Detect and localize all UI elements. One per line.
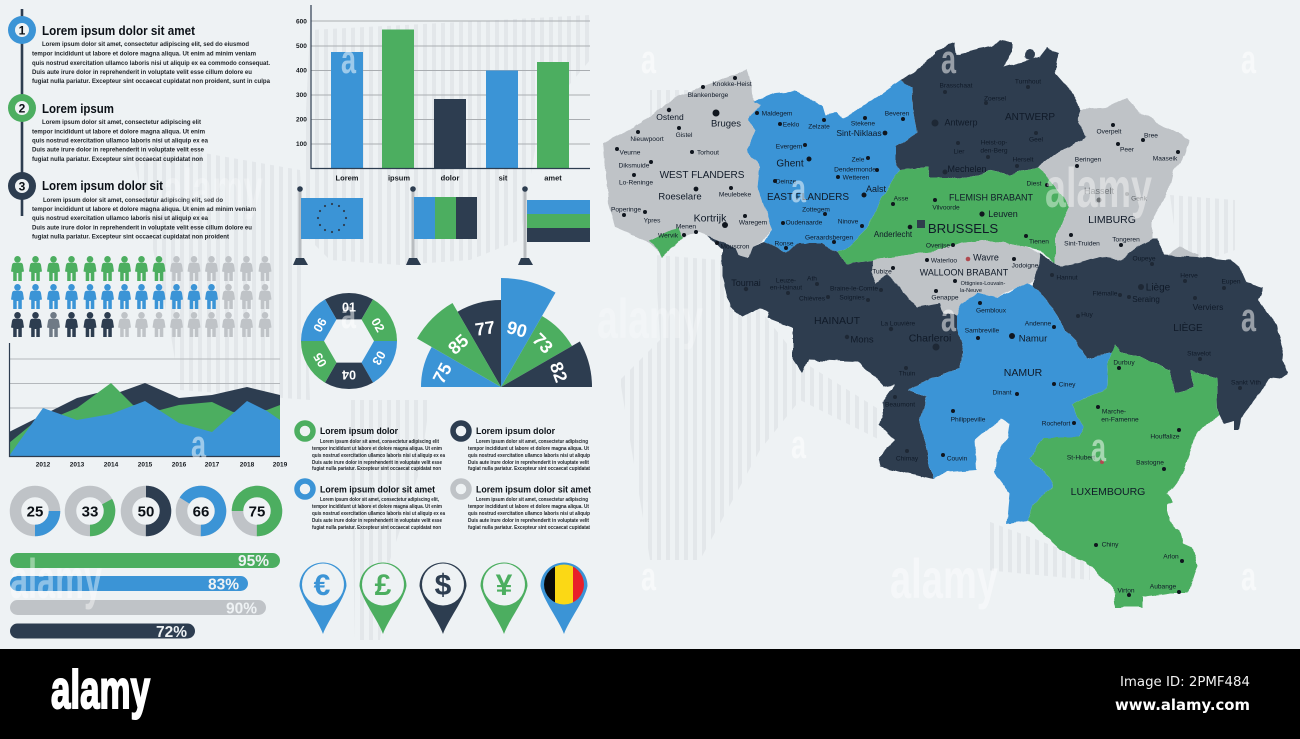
city labels: Hasselt [1084, 186, 1115, 196]
city labels: Philippeville [951, 416, 986, 424]
city labels: Geraardsbergen [805, 234, 853, 242]
city labels: Beveren [885, 110, 910, 118]
area chart: 2019 [273, 462, 288, 468]
legend: dark item: quis nostrud exercitation ullamco laboris nisi ut aliquip [468, 453, 591, 459]
province labels: LIÈGE [1173, 321, 1203, 334]
city labels: Waregem [739, 220, 768, 226]
legend: blue item: Lorem ipsum dolor sit amet, consectetur adipiscing elit, [320, 497, 439, 503]
watermarks: a [1091, 426, 1107, 470]
watermarks: a [641, 555, 657, 599]
watermarks: a [341, 38, 357, 82]
city labels: Genappe [931, 294, 959, 302]
city labels: Houffalize [1150, 434, 1180, 440]
donut 25 [16, 492, 54, 530]
city labels: Ypres [644, 218, 661, 224]
city labels: Huy [1081, 312, 1094, 318]
city labels: en-Famenne [1101, 416, 1139, 424]
region: Flemish Brabant [837, 167, 1070, 263]
bar chart: ipsum [388, 174, 410, 182]
bar chart: 200 [296, 116, 307, 124]
city labels: Durbuy [1113, 360, 1135, 366]
city labels: Sint-Niklaas [836, 128, 882, 138]
watermarks: alamy [597, 287, 703, 350]
watermarks: a [941, 38, 957, 82]
watermarks: a [791, 167, 807, 211]
legend: gray item: Lorem ipsum dolor sit amet [476, 484, 592, 496]
bar chart [296, 5, 590, 182]
step 2: Lorem ipsum [42, 102, 114, 116]
city labels: Gembloux [976, 308, 1007, 314]
area chart: 2012 [36, 462, 51, 468]
bar 72% [10, 624, 195, 641]
city labels: Menen [676, 224, 696, 230]
Brussels marker [917, 220, 925, 228]
step 1: Lorem ipsum dolor sit amet, consectetur adipiscing elit, sed do eiusmod [42, 41, 249, 48]
city labels: Dendermonde [834, 166, 876, 174]
fan chart [417, 278, 592, 387]
icon: dollar pin [420, 562, 466, 634]
region: Walloon Brabant [872, 240, 1040, 315]
legend: green item: Duis aute irure dolor in reprehenderit in voluptate velit esse [312, 460, 442, 466]
step 3: tempor incididunt ut labore et dolore magna aliqua. Ut enim ad minim veniam [32, 206, 256, 213]
legend: blue item: fugiat nulla pariatur. Excepteur sint occaecat cupidatat non [312, 525, 441, 531]
step 1: Duis aute irure dolor in reprehenderit in voluptate velit esse cillum dolore eu [32, 69, 252, 76]
province labels: WEST FLANDERS [660, 170, 745, 181]
city labels: Verviers [1193, 302, 1223, 312]
people pictogram chart [11, 256, 272, 337]
legend: green item: Lorem ipsum dolor sit amet, consectetur adipiscing elit [320, 439, 439, 445]
city labels: Evergem [776, 144, 803, 150]
province labels: LIMBURG [1088, 214, 1136, 226]
city labels: Overpelt [1097, 128, 1122, 136]
fan chart: 77 [474, 317, 496, 340]
step 1: 1 [19, 24, 26, 38]
region: Antwerp [895, 40, 1087, 180]
city labels: Deinze [776, 178, 797, 186]
city labels: Anderlecht [874, 230, 913, 239]
city labels: la-Neuve [960, 288, 982, 294]
city labels: Genk [1131, 196, 1148, 202]
city labels: Stavelot [1187, 350, 1211, 358]
flag: EU style [293, 186, 363, 265]
city labels: en-Hainaut [770, 284, 802, 292]
city labels: Zelzate [808, 124, 830, 130]
fan chart: 82 [546, 359, 571, 385]
legend: gray item [453, 481, 592, 531]
legend: green item: Lorem ipsum dolor [320, 426, 398, 437]
city labels: Sankt Vith [1231, 380, 1261, 386]
step 2: fugiat nulla pariatur. Excepteur sint occaecat cupidatat non [32, 156, 203, 163]
city labels: Brasschaat [940, 82, 973, 90]
bar 83%: 83% [208, 576, 239, 594]
step 3: Lorem ipsum dolor sit amet, consectetur adipiscing elit, sed do [43, 197, 223, 204]
bar 95% [10, 553, 280, 570]
step 3: Lorem ipsum dolor sit [42, 179, 164, 193]
province labels: WALLOON BRABANT [920, 268, 1009, 278]
province labels: FLEMISH BRABANT [949, 192, 1034, 202]
hexagon ring chart: 03 [369, 348, 388, 367]
legend: gray item: tempor incididunt ut labore et dolore magna aliqua. Ut [468, 504, 589, 510]
bar chart: Lorem [336, 174, 359, 182]
step 2: 2 [19, 102, 26, 116]
watermarks: a [1241, 296, 1257, 340]
area chart: 2018 [240, 462, 255, 468]
city labels: Namur [1019, 334, 1047, 344]
city labels: Couvin [947, 456, 968, 462]
area chart: 2015 [138, 462, 153, 468]
area chart: 2017 [205, 462, 220, 468]
fan chart: 73 [528, 329, 557, 358]
legend: gray item: quis nostrud exercitation ullamco laboris nisi ut aliquip [468, 511, 591, 517]
city labels: La Louvière [881, 320, 916, 328]
icon: pound pin: £ [375, 569, 392, 602]
bar 72%: 72% [156, 624, 187, 641]
city labels: Asse [894, 196, 909, 202]
province labels: NAMUR [1004, 367, 1043, 379]
flag: vertical tricolour [406, 186, 477, 265]
city labels: Andenne [1025, 320, 1052, 328]
donut 75: 75 [249, 504, 265, 520]
legend: dark item: Duis aute irure dolor in reprehenderit in voluptate velit [468, 460, 589, 466]
donut charts [16, 484, 276, 538]
city labels: Ninove [838, 218, 859, 226]
city labels: Beaumont [885, 402, 915, 408]
watermarks: a [641, 38, 657, 82]
city labels: Oudenaarde [786, 220, 823, 226]
city labels: Jodoigne [1012, 262, 1039, 270]
footer logo: alamy [51, 660, 150, 720]
province labels: EAST FLANDERS [767, 192, 849, 203]
legend: green item [297, 423, 446, 472]
watermarks: alamy [10, 547, 102, 610]
province labels: ANTWERP [1005, 112, 1055, 123]
hexagon ring chart: 01 [342, 300, 356, 314]
step 2: tempor incididunt ut labore et dolore magna aliqua. Ut enim [32, 128, 205, 136]
city labels: Zottegem [802, 206, 830, 214]
icon: dollar pin: $ [435, 569, 452, 602]
region: Voeren enclave [1168, 247, 1198, 264]
legend: green item: tempor incididunt ut labore et dolore magna aliqua. Ut enim [312, 446, 442, 452]
legend: blue item: Duis aute irure dolor in reprehenderit in voluptate velit esse [312, 518, 442, 524]
city labels: Roeselare [658, 192, 702, 202]
flag: horizontal tricolour [518, 186, 590, 265]
city labels: Seraing [1132, 295, 1160, 304]
city labels: Veurne [620, 150, 641, 156]
city labels: Mouscron [721, 244, 750, 250]
city labels: Tournai [731, 278, 761, 288]
city labels: Sint-Truiden [1064, 240, 1100, 248]
city labels: Marche- [1102, 408, 1126, 416]
legend: gray item: Lorem ipsum dolor sit amet, consectetur adipiscing [476, 497, 588, 503]
city labels: Meulebeke [719, 192, 751, 198]
city labels: Poperinge [611, 206, 641, 214]
step 1: tempor incididunt ut labore et dolore magna aliqua. Ut enim ad minim veniam [32, 50, 256, 58]
city labels: Leuven [988, 209, 1018, 219]
icon: yen pin: ¥ [496, 569, 513, 602]
city labels: Antwerp [944, 118, 978, 128]
city labels: Ronse [774, 240, 794, 248]
watermarks: a [1241, 38, 1257, 82]
city labels: Bree [1144, 132, 1158, 140]
city labels: Chiny [1102, 542, 1119, 548]
step 1: fugiat nulla pariatur. Excepteur sint occaecat cupidatat non proident, sunt in culpa [32, 78, 270, 85]
province labels [660, 112, 1203, 498]
bar chart: 300 [296, 92, 307, 99]
city labels: Chièvres [799, 296, 826, 302]
area chart: 2014 [104, 462, 119, 468]
region: Luxembourg [1028, 345, 1218, 607]
legend: blue item: tempor incididunt ut labore et dolore magna aliqua. Ut enim [312, 504, 442, 510]
city labels: Liège [1146, 282, 1171, 294]
city dots [615, 76, 1184, 597]
city labels: Rochefort [1042, 420, 1070, 428]
city labels: Ottignies-Louvain- [961, 281, 1005, 287]
watermarks: a [791, 423, 807, 467]
city labels: Stekene [851, 120, 875, 128]
bar chart: 600 [296, 18, 307, 26]
watermarks: a [1241, 555, 1257, 599]
city labels: Diest [1026, 180, 1042, 188]
step 3: fugiat nulla pariatur. Excepteur sint occaecat cupidatat non proident [32, 234, 230, 240]
icon: yen pin [480, 562, 528, 634]
icon: euro pin: € [314, 569, 331, 602]
city labels: Chimay [896, 456, 919, 462]
city labels: Beringen [1075, 156, 1102, 164]
hexagon ring chart: 02 [368, 316, 387, 335]
city labels: Nieuwpoort [630, 136, 664, 143]
step 2: Duis aute irure dolor in reprehenderit in voluptate velit esse [32, 146, 204, 154]
city labels: Dinant [992, 390, 1012, 396]
city labels: Vilvoorde [932, 204, 960, 212]
region: West Flanders [603, 70, 772, 258]
legend: green item: fugiat nulla pariatur. Excepteur sint occaecat cupidatat non [312, 466, 441, 472]
timeline panel [8, 9, 270, 240]
watermarks: a [341, 293, 357, 337]
legend: dark item: Lorem ipsum dolor [476, 426, 555, 437]
bar chart: 400 [296, 68, 307, 74]
city labels: Aalst [866, 184, 886, 194]
watermarks: alamy [1045, 156, 1152, 219]
city labels: Overijse [926, 242, 950, 250]
donut 66 [174, 484, 228, 538]
city labels: Blankenberge [688, 92, 729, 99]
region: Namur [908, 283, 1115, 523]
bar 90%: 90% [226, 600, 257, 618]
city labels: Peer [1120, 146, 1135, 154]
city labels: Maldegem [762, 110, 793, 118]
icon: euro pin [300, 562, 346, 634]
city labels: Lier [954, 148, 965, 156]
city labels: Eupen [1221, 278, 1241, 286]
step 2 [8, 94, 208, 163]
city labels: Sambreville [965, 328, 1000, 334]
city labels: Charleroi [909, 332, 951, 344]
city labels: Oupeye [1132, 256, 1156, 262]
city labels: Hannut [1056, 274, 1078, 282]
city labels: Mechelen [947, 164, 987, 174]
bar chart: 500 [296, 43, 307, 50]
city labels: Geel [1029, 136, 1043, 144]
region: Hainaut [708, 236, 963, 480]
legend: blue item: Lorem ipsum dolor sit amet [320, 484, 436, 496]
donut 50: 50 [138, 504, 154, 520]
city labels: Tienen [1029, 238, 1049, 246]
hexagon ring chart: 06 [311, 316, 330, 335]
area chart: 2013 [70, 462, 85, 468]
footer bar [0, 649, 1300, 739]
legend: gray item: fugiat nulla pariatur. Excepteur sint occaecat cupidatat [468, 525, 590, 531]
city labels [611, 78, 1261, 594]
city labels: Wervik [658, 232, 679, 240]
city labels: Flémalle [1093, 290, 1118, 298]
donut 33 [64, 485, 116, 537]
icon: Belgian flag pin [540, 562, 588, 634]
city labels: Zele [852, 156, 865, 164]
city labels: Braine-le-Comte [830, 286, 878, 292]
progress bars [10, 553, 280, 641]
city labels: Torhout [697, 150, 719, 156]
city labels: Leuze- [776, 278, 796, 284]
city labels: Lo-Reninge [619, 180, 653, 186]
legend: green item: quis nostrud exercitation ullamco laboris nisi ut aliquip ex ea [312, 453, 446, 459]
city labels: den-Berg [980, 148, 1008, 154]
city labels: Arlon [1163, 554, 1179, 560]
map of Belgium [603, 40, 1288, 607]
region: Liege [1033, 238, 1288, 430]
city labels: Diksmuide [619, 162, 650, 170]
bar chart: amet [544, 174, 562, 182]
city labels: Zoersel [984, 96, 1007, 102]
city labels: Ciney [1059, 382, 1076, 388]
city labels: Bruges [711, 118, 741, 130]
watermarks: alamy [890, 547, 998, 610]
hexagon ring chart: 04 [342, 368, 356, 382]
hexagon ring chart [301, 293, 397, 389]
city labels: Ostend [656, 112, 684, 122]
city labels: Maaseik [1153, 156, 1178, 162]
donut 75 [238, 492, 276, 530]
city labels: Herselt [1013, 156, 1034, 164]
city labels: Kortrijk [694, 212, 727, 224]
city labels: Soignies [839, 294, 865, 302]
province labels: BRUSSELS [928, 221, 998, 236]
city labels: Tubize [872, 268, 892, 276]
city labels: Tongeren [1112, 236, 1140, 244]
city labels: Knokke-Heist [712, 81, 752, 88]
fan chart: 85 [444, 330, 472, 359]
step 1: quis nostrud exercitation ullamco laboris nisi ut aliquip ex ea commodo consequat. [32, 60, 270, 67]
city labels: Turnhout [1015, 78, 1041, 86]
watermarks: alamy [163, 157, 263, 220]
watermarks: a [941, 296, 957, 340]
bar chart: dolor [441, 174, 459, 182]
region: East Flanders [747, 80, 917, 253]
bar 95%: 95% [238, 553, 269, 570]
legend: dark item: Lorem ipsum dolor sit amet, consectetur adipiscing [476, 439, 588, 445]
legend: blue item: quis nostrud exercitation ullamco laboris nisi ut aliquip ex ea [312, 511, 446, 517]
donut 66: 66 [193, 504, 209, 520]
region: Wervik patch [650, 227, 683, 257]
step 2: quis nostrud exercitation ullamco laboris nisi ut aliquip ex ea [32, 138, 208, 144]
legend: blue item [297, 481, 446, 531]
legend: dark item: tempor incididunt ut labore et dolore magna aliqua. Ut [468, 446, 589, 452]
city labels: Virton [1117, 588, 1135, 594]
city labels: Heist-op- [981, 140, 1007, 146]
area chart: 2016 [172, 462, 187, 468]
city labels: Mons [850, 334, 874, 346]
step 3: 3 [19, 180, 26, 194]
icon: pound pin [360, 562, 406, 634]
step 1: Lorem ipsum dolor sit amet [42, 24, 196, 38]
watermarks: a [191, 423, 207, 467]
bar 90% [10, 600, 266, 618]
step 1 [8, 16, 270, 85]
donut 33: 33 [82, 504, 98, 520]
step 3: Duis aute irure dolor in reprehenderit in voluptate velit esse cillum dolore eu [32, 224, 252, 232]
hexagon ring chart: 05 [311, 350, 330, 369]
city labels: Waterloo [931, 258, 957, 264]
step 2: Lorem ipsum dolor sit amet, consectetur adipiscing elit [42, 119, 202, 126]
donut 50 [126, 492, 166, 530]
fan chart: 75 [429, 360, 456, 387]
city labels: Wavre [973, 252, 999, 262]
donut 25: 25 [27, 504, 43, 520]
step 3 [8, 172, 256, 240]
city labels: Gistel [676, 132, 693, 139]
step 3: quis nostrud exercitation ullamco laboris nisi ut aliquip ex ea [32, 215, 208, 222]
city labels: Ath [807, 276, 817, 282]
area chart [9, 343, 288, 468]
city labels: Eeklo [783, 122, 800, 128]
province labels: HAINAUT [814, 315, 861, 327]
bar 83% [10, 576, 248, 594]
city labels: Ghent [776, 158, 804, 170]
province labels: LUXEMBOURG [1071, 486, 1145, 498]
city labels: Bastogne [1136, 460, 1164, 466]
enclave islet [1026, 50, 1034, 60]
city labels: Herve [1180, 272, 1198, 280]
city labels: Wetteren [843, 174, 870, 182]
legend: dark item: fugiat nulla pariatur. Excepteur sint occaecat cupidatat [468, 466, 590, 472]
city labels: St-Hubert [1067, 454, 1095, 462]
city labels: Aubange [1150, 584, 1177, 590]
region: Limburg [1038, 98, 1190, 267]
site url: www.alamy.com [1115, 696, 1250, 714]
bar chart: sit [499, 174, 508, 182]
city labels: Thuin [899, 370, 916, 378]
image id: Image ID: 2PMF484 [1120, 674, 1250, 690]
bar chart: 100 [296, 141, 307, 148]
legend: gray item: Duis aute irure dolor in reprehenderit in voluptate velit [468, 518, 589, 524]
fan chart: 90 [505, 317, 529, 342]
watermarks [10, 38, 1257, 610]
legend: dark item [453, 423, 591, 472]
